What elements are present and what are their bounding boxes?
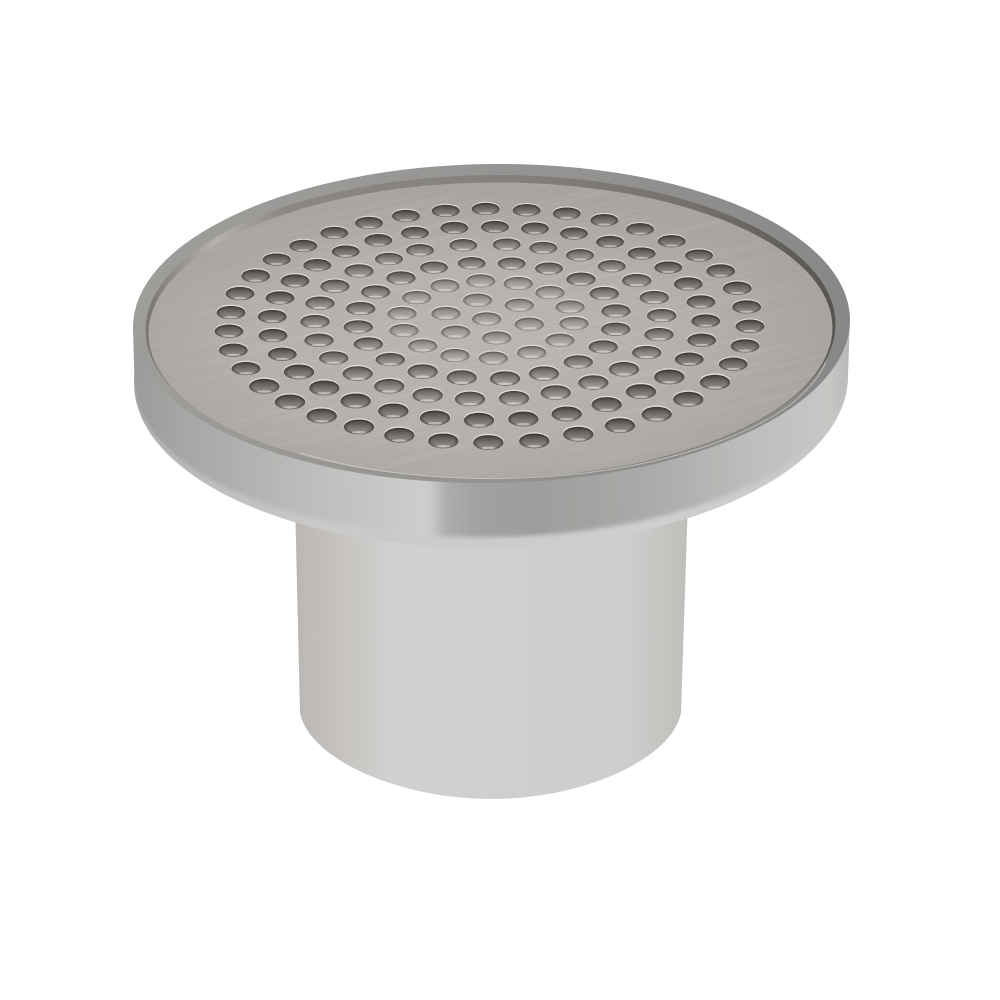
flange lower bevel xyxy=(132,208,850,552)
rim inner wall xyxy=(144,171,837,483)
drain pipe body xyxy=(295,500,688,799)
illustration: stainless steel round floor drain xyxy=(133,164,850,799)
flange outer band xyxy=(133,317,850,539)
rim top surface xyxy=(131,160,852,487)
perforation holes xyxy=(214,202,765,450)
brushed cover plate xyxy=(148,182,832,480)
flange head xyxy=(133,164,850,540)
